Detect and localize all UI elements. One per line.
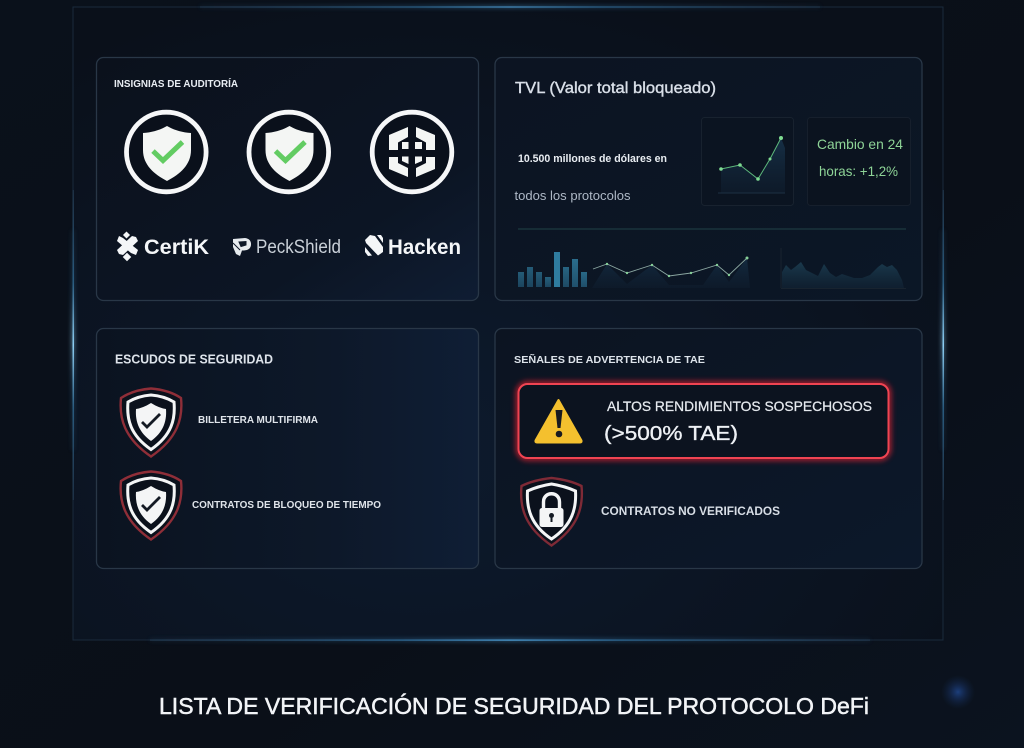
glow dot bbox=[941, 675, 975, 709]
panel: TVL bbox=[495, 58, 922, 300]
icon: timelock shield bbox=[121, 472, 181, 540]
text: timelock contracts: CONTRATOS DE BLOQUEO DE TIEMPO bbox=[192, 500, 381, 511]
logo text: PeckShield: PeckShield bbox=[256, 237, 341, 258]
text: change line 2: horas: +1,2% bbox=[819, 163, 898, 179]
icon: warning triangle bbox=[535, 400, 582, 442]
chart: 24h line chart bbox=[702, 118, 794, 206]
panel: security shields bbox=[96, 328, 478, 568]
heading: security shields: ESCUDOS DE SEGURIDAD bbox=[115, 352, 273, 366]
icon: multisig shield bbox=[121, 388, 181, 456]
logo text: Hacken: Hacken bbox=[388, 236, 461, 259]
icon: badge shield check 1 bbox=[126, 112, 206, 192]
text: over 500% APY: (>500% TAE) bbox=[604, 423, 738, 445]
chart: mini line with area bbox=[592, 256, 750, 288]
heading: audit badges: INSIGNIAS DE AUDITORÍA bbox=[114, 77, 238, 90]
text: across protocols: todos los protocolos bbox=[514, 189, 630, 203]
title: LISTA DE VERIFICACIÓN DE SEGURIDAD DEL PROTOCOLO DeFi bbox=[159, 693, 869, 719]
callout: suspicious high yields bbox=[518, 384, 888, 458]
heading: APY warning signs: SEÑALES DE ADVERTENCIA DE TAE bbox=[514, 353, 705, 366]
icon: badge shield check 2 bbox=[249, 112, 329, 192]
text: unverified contracts: CONTRATOS NO VERIFICADOS bbox=[601, 506, 780, 518]
logo: Hacken bbox=[365, 235, 461, 259]
chart: mini area bbox=[781, 248, 906, 288]
text: multisig wallet: BILLETERA MULTIFIRMA bbox=[198, 415, 318, 426]
text: high yields: ALTOS RENDIMIENTOS SOSPECHOSOS bbox=[607, 398, 872, 414]
heading: TVL: TVL (Valor total bloqueado) bbox=[515, 80, 716, 97]
panel: audit badges bbox=[96, 58, 478, 300]
chart: mini bars bbox=[518, 252, 587, 287]
text: TVL amount: 10.500 millones de dólares en bbox=[518, 153, 667, 165]
text: change line 1: Cambio en 24 bbox=[817, 136, 903, 152]
icon: lock shield bbox=[521, 478, 582, 546]
logo text: CertiK: CertiK bbox=[144, 236, 209, 259]
panel: APY warning signs bbox=[495, 328, 922, 568]
logo: PeckShield bbox=[233, 237, 341, 258]
logo: CertiK bbox=[117, 231, 209, 261]
outer frame bbox=[72, 6, 944, 642]
panel: 24h change bbox=[808, 118, 910, 206]
icon: Hacken hexagon badge bbox=[372, 112, 452, 192]
